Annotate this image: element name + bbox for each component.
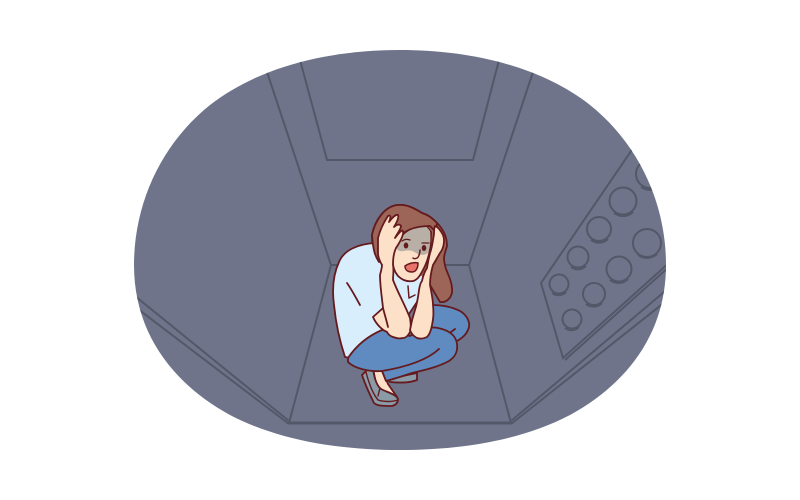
elevator interior lines (130, 60, 670, 424)
front foot and shoe (362, 368, 398, 406)
neck (396, 270, 424, 300)
shirt (333, 243, 425, 358)
woman figure (333, 205, 469, 406)
elbow crease (383, 308, 388, 327)
hair fringe (372, 205, 437, 262)
illustration: woman crouching in elevator (134, 50, 666, 450)
collar lines (408, 286, 415, 298)
wall button panel (541, 138, 670, 360)
sleeve crease (347, 283, 360, 305)
mouth (405, 263, 418, 272)
nose (413, 250, 420, 259)
elevator background blob (134, 50, 666, 450)
front leg jeans (348, 327, 457, 381)
right arm and hand (410, 226, 444, 339)
panel buttons (550, 160, 664, 330)
back shoe (388, 373, 417, 383)
hair back (372, 205, 452, 302)
jeans fold (382, 349, 439, 371)
eyes (402, 239, 429, 251)
back leg jeans (420, 305, 469, 345)
face (393, 224, 431, 281)
left arm and hand (373, 215, 411, 338)
shadow over eyes (396, 225, 430, 255)
